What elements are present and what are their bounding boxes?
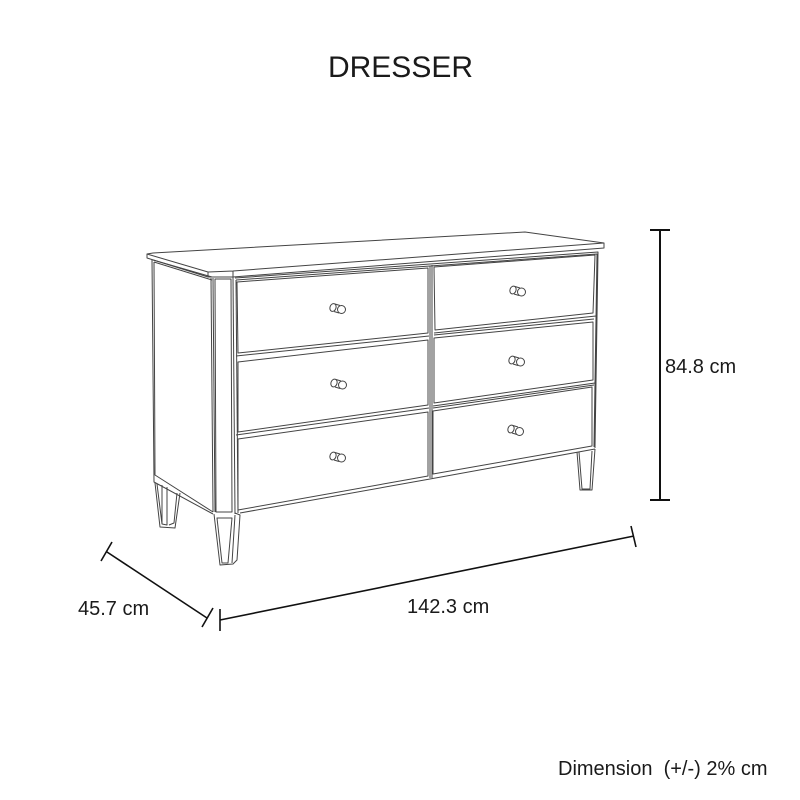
knob: middle left [330, 378, 346, 389]
knob: bottom right [507, 424, 524, 436]
carcass rails and dividers [235, 252, 598, 513]
drawer: middle right [434, 322, 593, 403]
drawer: bottom left [238, 412, 428, 510]
footnote: Dimension (+/-) 2% cm [558, 758, 768, 780]
drawer: middle left [238, 340, 428, 432]
drawer: top right [434, 255, 595, 330]
side panel [152, 260, 213, 514]
dimension: height [650, 230, 670, 500]
dimension: width [220, 526, 636, 631]
leg: front [214, 513, 240, 565]
dimension: depth [101, 542, 213, 627]
leg: back left [155, 483, 180, 528]
drawer: bottom right [433, 387, 592, 474]
label: width: 142.3 cm [407, 596, 489, 618]
knob: bottom left [329, 451, 346, 462]
leg: back right [577, 449, 595, 490]
knob: middle right [508, 355, 524, 366]
knob: top right [509, 285, 526, 296]
label: depth: 45.7 cm [78, 598, 149, 620]
table top [147, 232, 604, 277]
knob: top left [329, 303, 346, 314]
title: DRESSER [328, 51, 473, 84]
label: height: 84.8 cm [665, 356, 736, 378]
corner post [211, 277, 235, 514]
drawer: top left [237, 268, 428, 353]
illustration: dresser line drawing [147, 232, 604, 565]
